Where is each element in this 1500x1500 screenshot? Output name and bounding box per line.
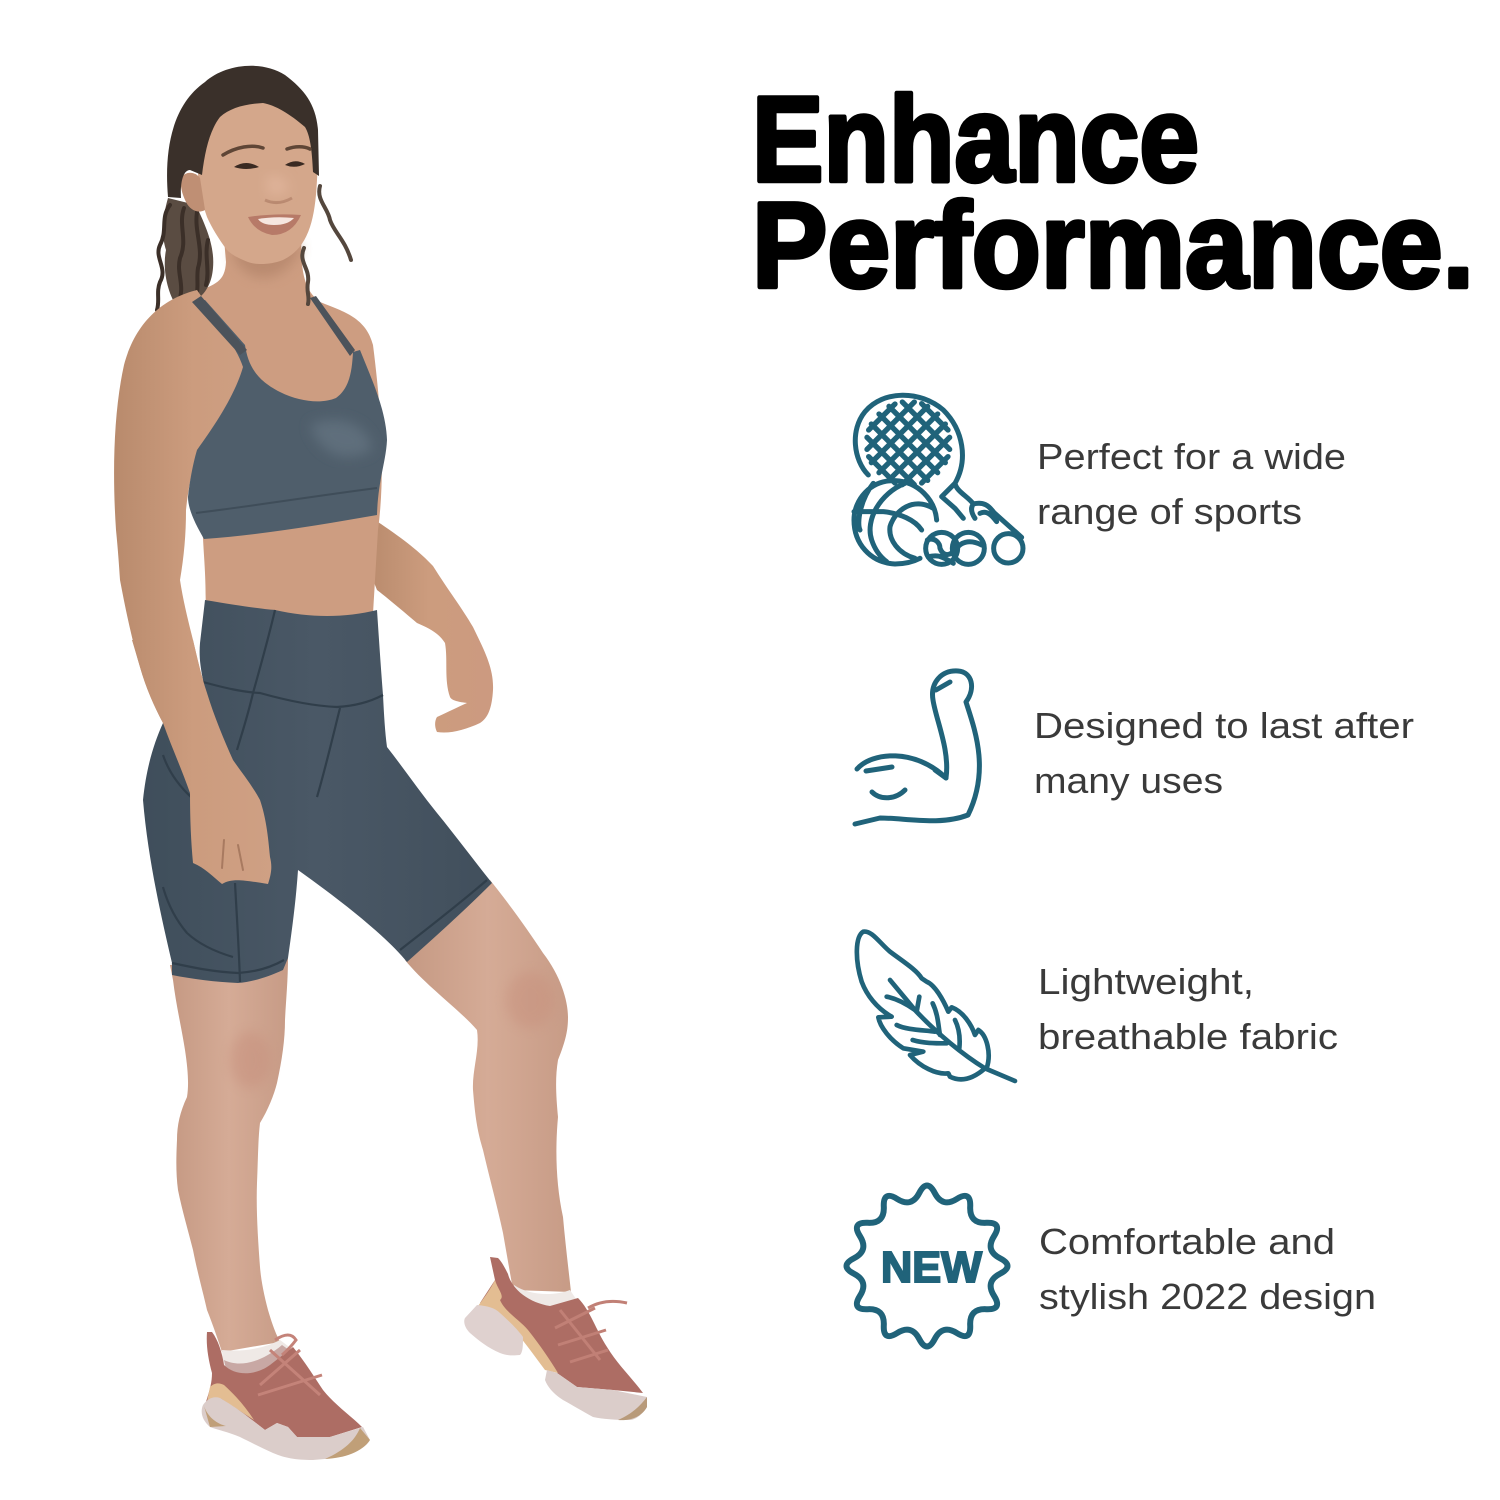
- text: durability: [1034, 705, 1414, 801]
- torso skin: [192, 215, 382, 630]
- near forearm and hand over shorts: [132, 640, 271, 884]
- icon: new badge: NEW: [881, 1243, 982, 1292]
- text: durability: Designed to last after: [1034, 705, 1414, 746]
- icon: new badge: [846, 1186, 1008, 1346]
- left shoe: [202, 1332, 370, 1460]
- icon: feather: [857, 932, 1015, 1081]
- raised leg: [405, 880, 571, 1292]
- text: sports: range of sports: [1037, 491, 1302, 532]
- ear: [181, 173, 205, 212]
- text: sports: [1037, 436, 1346, 532]
- back arm and hand: [365, 500, 493, 733]
- heading: [752, 71, 1474, 313]
- right shoe: [464, 1257, 647, 1420]
- text: lightweight: Lightweight,: [1038, 961, 1254, 1002]
- sports bra: [188, 296, 387, 539]
- eyes, brows and smile: [223, 146, 310, 235]
- icon: flexed arm: [855, 671, 979, 824]
- heading: Enhance: [752, 71, 1199, 207]
- text: lightweight: breathable fabric: [1038, 1016, 1338, 1057]
- hair: [167, 66, 319, 198]
- text: design: Comfortable and: [1039, 1221, 1335, 1262]
- icon: sports equipment: [854, 395, 1023, 564]
- standing leg: [170, 958, 288, 1352]
- text: lightweight: [1038, 961, 1338, 1057]
- bike shorts: [143, 600, 492, 983]
- text: design: stylish 2022 design: [1039, 1276, 1376, 1317]
- face: [198, 91, 317, 264]
- text: sports: Perfect for a wide: [1037, 436, 1346, 477]
- text: design: [1039, 1221, 1376, 1317]
- photo: woman in sports bra and bike shorts: [114, 66, 647, 1460]
- ponytail and loose curls: [157, 186, 351, 310]
- near arm: [114, 290, 271, 884]
- text: durability: many uses: [1034, 760, 1223, 801]
- neck shading: [232, 244, 300, 278]
